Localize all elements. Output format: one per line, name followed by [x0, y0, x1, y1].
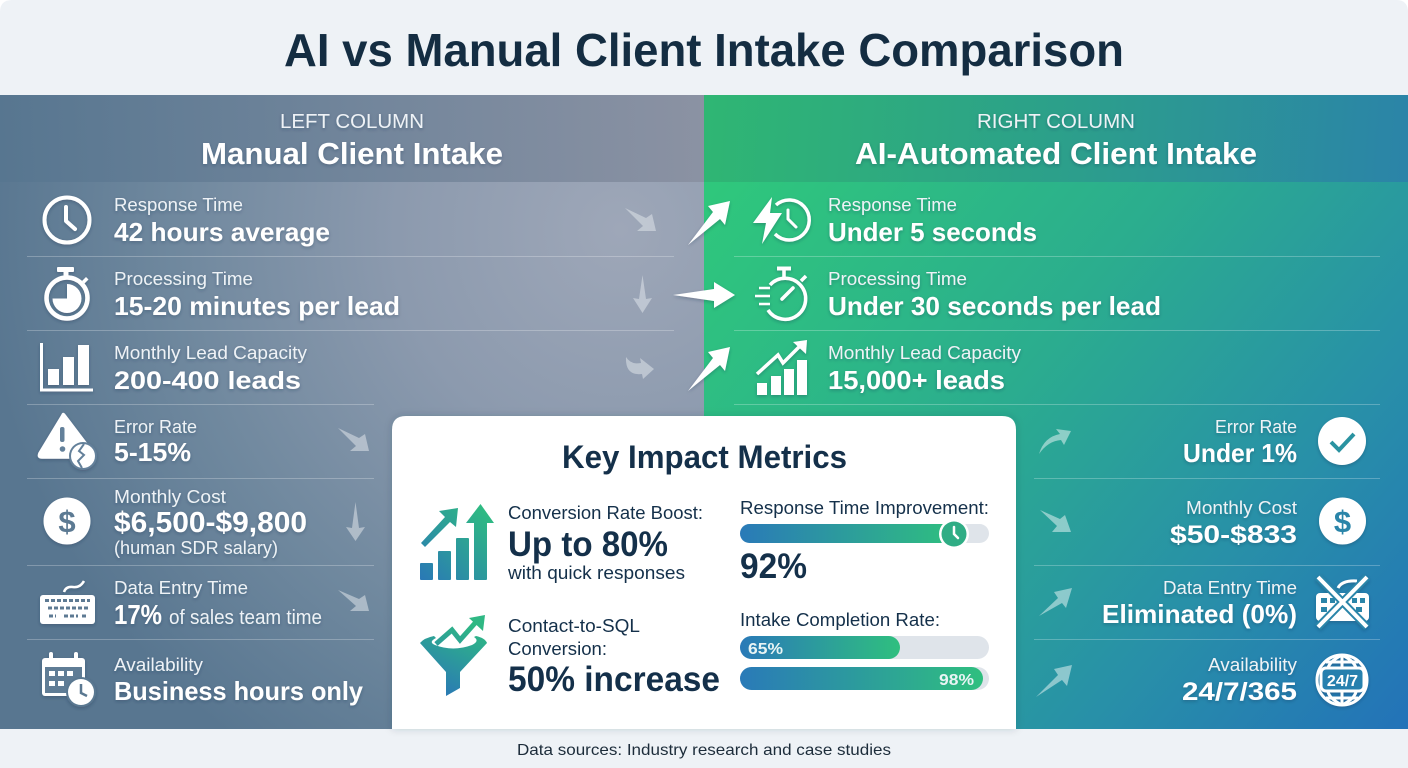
row: monthly cost AI: Monthly Cost	[1186, 498, 1297, 518]
row: availability manual: Business hours only	[114, 676, 364, 706]
arrow: processing time faded	[633, 275, 652, 313]
row: monthly lead capacity manual	[42, 343, 307, 395]
icon: check circle	[1318, 417, 1366, 465]
faded arrows: manual column	[338, 208, 656, 611]
row: data entry time manual: of sales team time	[169, 607, 322, 629]
icon: globe 24/7: 24/7	[1327, 673, 1358, 690]
row: monthly lead capacity AI: 15,000+ leads	[828, 365, 1005, 395]
icon: dollar coin AI: $	[1334, 504, 1351, 539]
row: response time AI	[753, 195, 1037, 247]
row: processing time manual	[46, 267, 400, 321]
row: error rate AI: Error Rate	[1215, 417, 1297, 437]
faded arrows: AI lower rows	[1036, 429, 1072, 697]
bright arrows: AI column	[673, 201, 735, 391]
arrow: lead capacity faded	[626, 357, 654, 379]
footer: data sources: Data sources: Industry research and case studies	[517, 742, 891, 759]
row: monthly lead capacity manual: Monthly Lead Capacity	[114, 343, 307, 363]
icon: calendar with clock	[42, 652, 96, 707]
row: response time AI: Under 5 seconds	[828, 217, 1037, 247]
metric: conversion rate boost: Conversion Rate Boost:	[508, 503, 703, 523]
arrow: monthly cost AI	[1040, 510, 1071, 532]
metric: response time improvement	[740, 498, 989, 586]
icon: funnel with trend arrow	[420, 615, 487, 696]
row: data entry time manual	[40, 578, 322, 630]
row: monthly cost manual	[44, 487, 307, 558]
arrow: error rate AI	[1039, 429, 1071, 454]
row: monthly lead capacity AI: Monthly Lead Capacity	[828, 343, 1021, 363]
arrow: response time	[688, 201, 730, 245]
row: availability manual: Availability	[114, 655, 203, 675]
panel: AI-automated client intake background	[704, 95, 1408, 729]
arrow: lead capacity	[688, 347, 730, 391]
metric: contact-to-SQL conversion: Contact-to-SQL	[508, 616, 640, 636]
AI rows	[753, 195, 1369, 706]
icon: bar chart	[42, 343, 93, 390]
row: processing time manual: Processing Time	[114, 269, 253, 289]
row: monthly cost manual: $6,500-$9,800	[114, 507, 307, 539]
arrow: monthly cost faded	[346, 502, 365, 541]
heading: right column: AI-Automated Client Intake	[855, 136, 1257, 171]
icon: lightning clock	[753, 197, 809, 244]
row: monthly cost AI: $50-$833	[1170, 521, 1297, 549]
row: monthly cost manual: Monthly Cost	[114, 487, 226, 507]
metric: intake completion rate	[740, 610, 989, 690]
icon: dollar coin: $	[58, 504, 76, 539]
row: monthly cost AI	[1170, 498, 1366, 549]
metric: conversion rate boost: with quick responses	[507, 563, 685, 583]
row: data entry time manual: 17%	[114, 599, 162, 630]
metric: conversion rate boost	[507, 503, 703, 583]
icon: crossed keyboard	[1316, 577, 1369, 627]
metric: intake completion rate: Intake Completion Rate:	[740, 610, 940, 630]
icon: keyboard	[40, 581, 95, 624]
row: error rate AI: Under 1%	[1183, 438, 1297, 468]
row: response time AI: Response Time	[828, 195, 957, 215]
row: data entry time manual: Data Entry Time	[114, 578, 248, 598]
title: AI vs Manual Client Intake Comparison	[284, 24, 1124, 76]
arrow: error rate faded	[338, 428, 369, 451]
row: availability AI	[1182, 655, 1367, 706]
row: data entry time AI: Data Entry Time	[1163, 578, 1297, 598]
panel header: AI band	[704, 95, 1408, 182]
icon: warning with broken circle	[38, 414, 97, 470]
row: monthly cost manual: (human SDR salary)	[114, 538, 278, 558]
row: availability AI: Availability	[1208, 655, 1297, 675]
manual rows	[38, 195, 400, 707]
row: monthly lead capacity AI	[757, 340, 1021, 395]
row: processing time AI: Under 30 seconds per lead	[828, 291, 1161, 321]
icon: stopwatch	[46, 267, 88, 318]
arrow: data entry AI	[1039, 588, 1072, 616]
metric: response time improvement: Response Time Improvement:	[740, 498, 989, 518]
progress bar: 65%: 65%	[748, 641, 783, 658]
metric: response time improvement: 92%	[740, 547, 807, 586]
row: data entry time AI	[1102, 577, 1369, 629]
icon: dollar coin AI	[1319, 498, 1366, 544]
icon: growth bars with arrows	[420, 504, 494, 580]
panel header: manual band	[0, 95, 704, 182]
metric: contact-to-SQL conversion: Conversion:	[508, 639, 607, 659]
row: processing time AI	[755, 268, 1161, 321]
row: error rate manual	[38, 414, 197, 470]
heading: right column: RIGHT COLUMN	[977, 111, 1135, 133]
heading: left column: LEFT COLUMN	[280, 111, 424, 133]
row: error rate manual: Error Rate	[114, 417, 197, 437]
icon: fast stopwatch	[755, 268, 806, 319]
row: monthly lead capacity manual: 200-400 leads	[114, 367, 301, 395]
row: error rate AI	[1183, 417, 1366, 468]
row: error rate manual: 5-15%	[114, 437, 191, 467]
arrow: processing time	[673, 282, 735, 308]
row: availability AI: 24/7/365	[1182, 678, 1297, 706]
row: response time manual: Response Time	[114, 195, 243, 215]
metric: contact-to-SQL conversion: 50% increase	[508, 660, 720, 699]
heading: left column: Manual Client Intake	[201, 136, 503, 171]
progress bar: 98%	[740, 667, 989, 690]
icon: globe 24/7	[1317, 655, 1367, 705]
panel: manual client intake background	[0, 95, 704, 729]
progress bar: 98%: 98%	[939, 672, 974, 689]
row: response time manual: 42 hours average	[114, 217, 330, 247]
row: processing time AI: Processing Time	[828, 269, 967, 289]
row: response time manual	[44, 195, 330, 247]
progress bar: 65%	[740, 636, 989, 659]
arrow: availability AI	[1036, 665, 1072, 697]
heading: right column	[855, 111, 1257, 171]
arrow: response time faded	[625, 208, 656, 231]
arrow: data entry faded	[338, 590, 369, 611]
metric: conversion rate boost: Up to 80%	[508, 525, 668, 564]
icon: dollar coin	[44, 498, 90, 544]
row: processing time manual: 15-20 minutes per lead	[114, 291, 400, 321]
panel: key impact metrics card	[392, 416, 1016, 729]
progress bar: 92%	[740, 519, 989, 549]
metric: contact-to-SQL conversion	[508, 616, 720, 699]
row: availability manual	[42, 652, 364, 707]
heading: left column	[201, 111, 503, 171]
row: data entry time AI: Eliminated (0%)	[1102, 599, 1297, 629]
heading: key impact metrics: Key Impact Metrics	[562, 439, 847, 475]
icon: clock	[44, 198, 90, 242]
icon: growth chart	[757, 340, 807, 395]
